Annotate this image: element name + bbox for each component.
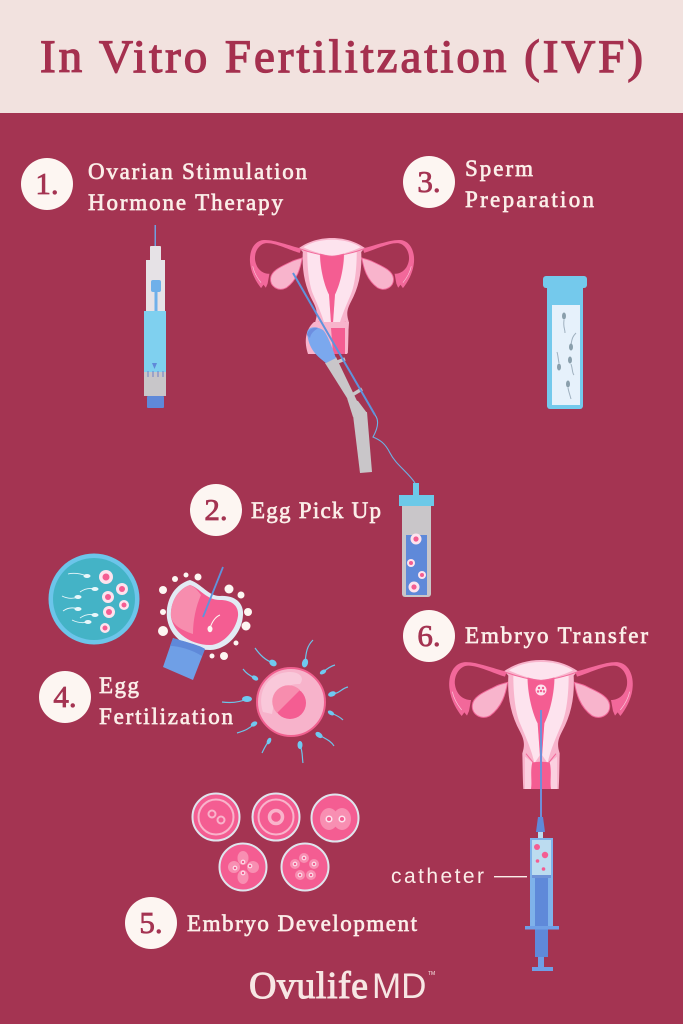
step 2 heading: Egg Pick Up	[251, 498, 381, 523]
step 1 heading	[88, 159, 308, 215]
icon: uterus with embryo	[449, 660, 633, 789]
step 3 badge	[403, 156, 455, 208]
step 3 heading: Sperm	[465, 156, 533, 181]
tube wire	[373, 415, 415, 483]
step 4 heading: Fertilization	[99, 704, 234, 729]
catheter label	[391, 865, 527, 888]
icon: egg surrounded by sperm	[222, 640, 348, 763]
logo: MD	[372, 967, 426, 1006]
step 5 badge: 5.	[139, 905, 163, 940]
step 3 heading	[465, 156, 594, 212]
header band	[0, 0, 683, 113]
step 2 badge	[190, 484, 242, 536]
embryo: two cell	[312, 794, 358, 842]
icon: hormone injection pen	[144, 225, 166, 408]
icon: transfer syringe	[525, 710, 559, 971]
icon: petri dish with sperm and eggs	[48, 554, 140, 644]
logo: Ovulife	[249, 965, 368, 1007]
icon: sperm injection into egg	[158, 567, 252, 680]
icon: sperm test tube	[543, 276, 587, 409]
icon: uterus with egg retrieval probe	[250, 238, 414, 473]
catheter label: catheter	[391, 865, 484, 888]
step 1 badge	[21, 158, 73, 210]
ultrasound probe	[307, 327, 372, 473]
step 5 heading: Embryo Development	[187, 911, 418, 936]
step 6 heading: Embryo Transfer	[465, 623, 648, 648]
embryo: four cell	[220, 844, 266, 890]
aspiration needle	[293, 273, 375, 415]
step 4 heading	[99, 673, 234, 729]
step 1 heading: Hormone Therapy	[88, 190, 284, 215]
icon: developing embryos	[192, 794, 358, 890]
logo: TM	[428, 971, 435, 977]
step 6 badge	[403, 610, 455, 662]
embryo: two pronuclei	[192, 794, 240, 840]
step 1 heading: Ovarian Stimulation	[88, 159, 308, 184]
step 6 badge: 6.	[417, 618, 441, 653]
step 4 heading: Egg	[99, 673, 140, 698]
icon: egg collection tube	[399, 483, 434, 597]
embryo in uterus	[536, 684, 546, 696]
embryo: multi cell	[282, 844, 328, 890]
step 1 badge: 1.	[35, 166, 59, 201]
step 2 badge: 2.	[204, 492, 228, 527]
embryo: single cell	[252, 794, 300, 840]
step 4 badge	[39, 671, 91, 723]
step 5 badge	[125, 897, 177, 949]
step 3 badge: 3.	[417, 164, 441, 199]
step 3 heading: Preparation	[465, 187, 594, 212]
title: In Vitro Fertilitzation (IVF)	[40, 31, 643, 83]
logo	[249, 965, 435, 1007]
step 4 badge: 4.	[53, 679, 77, 714]
